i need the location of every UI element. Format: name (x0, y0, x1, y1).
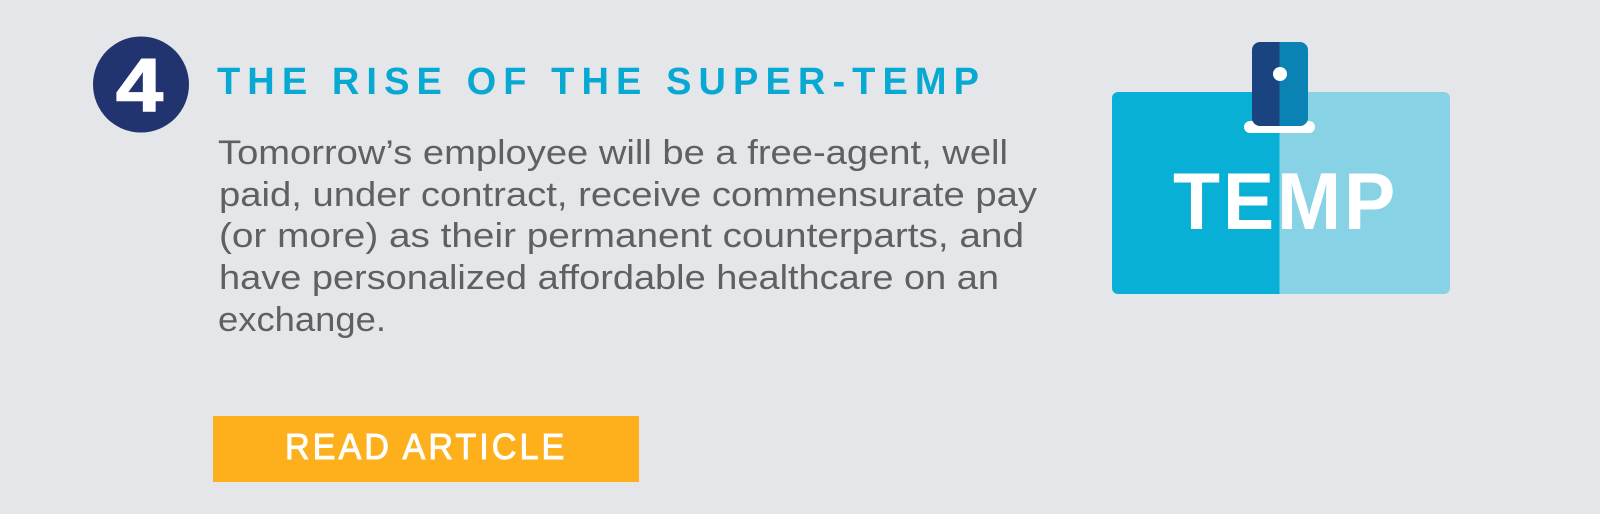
body text: have personalized affordable healthcare on an (219, 259, 999, 297)
icon: temp badge (1112, 42, 1450, 294)
badge card right half (1280, 92, 1450, 294)
body text: Tomorrow’s employee will be a free-agent, well (218, 134, 1008, 172)
body text (218, 134, 1037, 339)
badge clip (1252, 42, 1308, 126)
badge label: TEMP: TEMP (1173, 155, 1395, 246)
body text: paid, under contract, receive commensurate pay (219, 176, 1037, 214)
badge card left half (1112, 92, 1280, 294)
number badge: 4: 4 (116, 43, 163, 127)
badge slot (1244, 121, 1315, 133)
body text: (or more) as their permanent counterparts, and (219, 217, 1024, 255)
body text: exchange. (218, 301, 386, 339)
title: THE RISE OF THE SUPER-TEMP (217, 61, 979, 103)
button: read article: READ ARTICLE (285, 427, 564, 467)
button: read article (213, 416, 639, 482)
number badge: 4 (93, 36, 189, 132)
